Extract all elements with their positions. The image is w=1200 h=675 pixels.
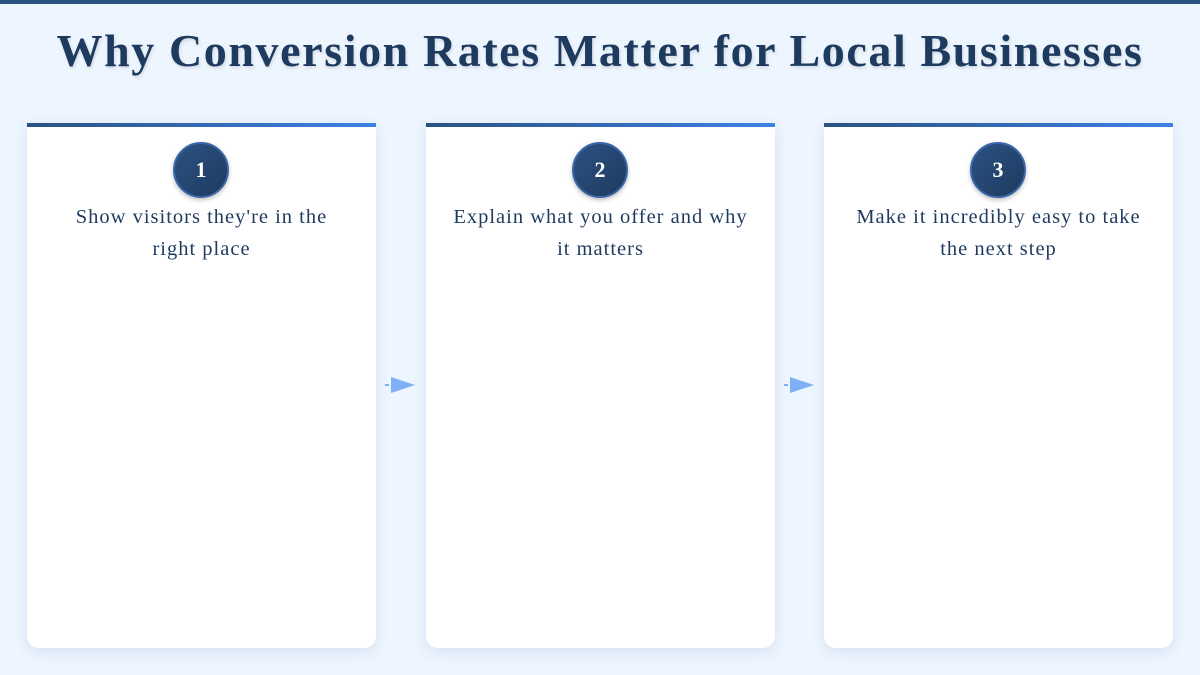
text: step 1: [76, 206, 327, 260]
badge: 3: [970, 142, 1026, 198]
arrow: 2 to 3: [784, 377, 814, 393]
arrow: 1 to 2: [385, 377, 415, 393]
panel: step 1: [27, 123, 376, 648]
badge: 3: 3: [992, 157, 1004, 182]
badge: 1: 1: [196, 157, 206, 182]
panel: step 2: [426, 123, 775, 648]
text: step 1: right place: [152, 238, 251, 260]
badge: 2: 2: [594, 157, 606, 182]
text: step 2: it matters: [557, 238, 644, 260]
badge: 2: [572, 142, 628, 198]
badge: 1: [173, 142, 229, 198]
title: Why Conversion Rates Matter for Local Businesses: [56, 25, 1144, 76]
panel: step 3: [824, 123, 1173, 648]
text: step 3: [856, 206, 1141, 260]
text: step 2: Explain what you offer and why: [453, 206, 748, 228]
text: step 2: [453, 206, 748, 260]
text: step 3: the next step: [940, 238, 1057, 260]
text: step 3: Make it incredibly easy to take: [856, 206, 1141, 228]
text: step 1: Show visitors they're in the: [76, 206, 327, 228]
